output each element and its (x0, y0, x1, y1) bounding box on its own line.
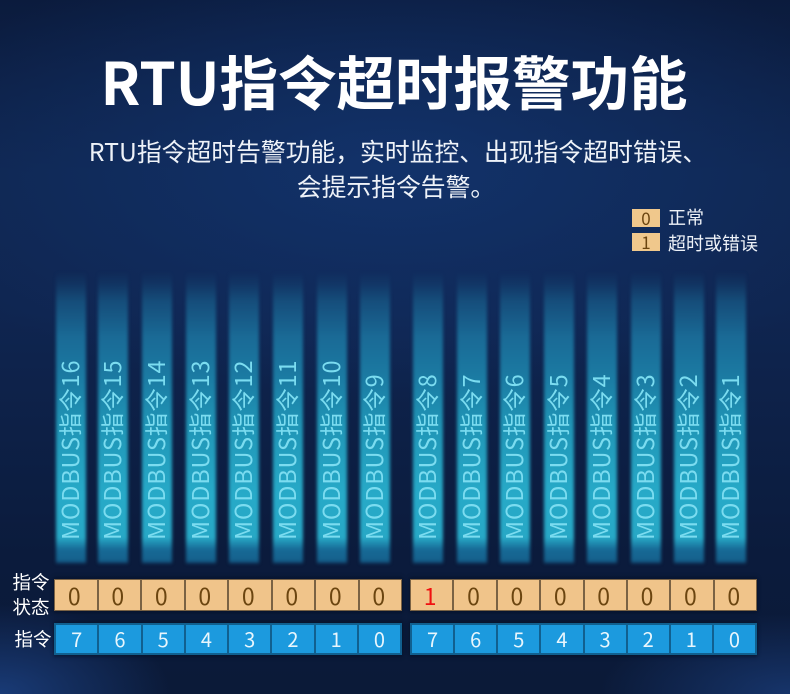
bit row: high byte: 0 (374, 624, 385, 653)
bar: MODBUS instruction 14 (138, 281, 174, 565)
bit row: low byte: 6 (470, 624, 481, 653)
title: RTU指令超时报警功能 (100, 37, 688, 122)
label: instruction: 指令 (14, 626, 52, 652)
legend item: normal (632, 204, 704, 230)
bar: MODBUS instruction 5: MODBUS指令5 (540, 373, 574, 540)
bar: MODBUS instruction 6 (496, 282, 532, 565)
bar: MODBUS instruction 1: MODBUS指令1 (712, 373, 746, 540)
bar: MODBUS instruction 12: MODBUS指令12 (225, 360, 259, 540)
bar: MODBUS instruction 16 (52, 280, 88, 565)
bit row: low byte: 7 (427, 624, 438, 653)
bit row: low byte: 0 (729, 624, 740, 653)
bar: MODBUS instruction 8 (409, 282, 446, 565)
bar: MODBUS instruction 2: MODBUS指令2 (670, 373, 704, 540)
bar: MODBUS instruction 11: MODBUS指令11 (269, 360, 303, 540)
bar: MODBUS instruction 13 (182, 281, 218, 565)
status row: low byte: 0 (727, 578, 740, 612)
legend item: normal: 0 (641, 205, 651, 230)
status row: high byte: 0 (68, 578, 81, 612)
bit row: low byte: 5 (513, 624, 524, 653)
bar: MODBUS instruction 10: MODBUS指令10 (313, 360, 347, 540)
bit row: high byte: 6 (114, 624, 125, 653)
bar: MODBUS instruction 7: MODBUS指令7 (453, 373, 487, 540)
bit row: high byte: 4 (201, 624, 212, 653)
bar: MODBUS instruction 8: MODBUS指令8 (409, 373, 443, 540)
status row: low byte: 0 (641, 578, 653, 612)
bar: MODBUS instruction 9: MODBUS指令9 (356, 373, 390, 540)
bar: MODBUS instruction 4 (583, 281, 620, 565)
bit row: high byte: 5 (158, 624, 169, 653)
bit row: high byte: 2 (287, 624, 298, 653)
bit row: high byte: 7 (71, 624, 82, 653)
bit row: low byte: 4 (556, 624, 567, 653)
bar: MODBUS instruction 4: MODBUS指令4 (583, 373, 617, 540)
status row: low byte (410, 579, 757, 611)
status row: high byte: 0 (155, 578, 168, 612)
label: instruction status (12, 569, 50, 620)
status row: high byte: 0 (372, 578, 385, 612)
status row: low byte: 1 (424, 578, 437, 612)
status row: high byte (54, 579, 402, 611)
bar: MODBUS instruction 2 (670, 280, 706, 565)
bar: MODBUS instruction 1 (712, 280, 748, 565)
bit row: high byte (54, 623, 402, 655)
label: instruction status: 状态 (12, 594, 50, 620)
status row: high byte: 0 (329, 578, 342, 612)
bar: MODBUS instruction 12 (225, 281, 262, 565)
status row: high byte: 0 (285, 578, 298, 612)
subtitle text (89, 133, 707, 204)
instruction bars (52, 280, 748, 565)
bar: MODBUS instruction 3: MODBUS指令3 (627, 373, 661, 540)
bar: MODBUS instruction 15: MODBUS指令15 (94, 360, 128, 540)
bar: MODBUS instruction 7 (453, 282, 490, 565)
bit row: high byte: 1 (331, 624, 342, 653)
legend item: timeout or error (632, 229, 758, 256)
bit row: low byte: 1 (686, 624, 697, 653)
status row: low byte: 0 (511, 578, 523, 612)
status row: low byte: 0 (554, 578, 567, 612)
bar: MODBUS instruction 14: MODBUS指令14 (138, 360, 172, 540)
bar: MODBUS instruction 11 (269, 282, 306, 565)
bar: MODBUS instruction 16: MODBUS指令16 (52, 360, 86, 540)
bit row: low byte (410, 623, 757, 655)
bar: MODBUS instruction 3 (627, 281, 664, 565)
legend (632, 204, 758, 256)
status row: low byte: 0 (467, 578, 480, 612)
status row: high byte: 0 (198, 578, 211, 612)
bar: MODBUS instruction 13: MODBUS指令13 (182, 360, 216, 540)
bit row: high byte: 3 (244, 624, 255, 653)
bar: MODBUS instruction 6: MODBUS指令6 (496, 373, 530, 540)
status row: low byte: 0 (597, 578, 610, 612)
bar: MODBUS instruction 10 (313, 282, 350, 565)
bit row: low byte: 3 (600, 624, 611, 653)
subtitle text: 会提示指令告警。 (297, 168, 495, 204)
legend item: timeout or error: 1 (641, 229, 651, 254)
bit row: low byte: 2 (643, 624, 654, 653)
label: instruction status: 指令 (12, 569, 50, 595)
bar: MODBUS instruction 9 (356, 282, 392, 565)
bar: MODBUS instruction 15 (94, 281, 130, 565)
status row: high byte: 0 (111, 578, 124, 612)
legend item: normal: 正常 (668, 204, 704, 230)
status row: high byte: 0 (242, 578, 255, 612)
bar: MODBUS instruction 5 (540, 281, 576, 565)
subtitle text: RTU指令超时告警功能，实时监控、出现指令超时错误、 (89, 133, 707, 169)
status row: low byte: 0 (684, 578, 697, 612)
legend item: timeout or error: 超时或错误 (668, 230, 758, 256)
